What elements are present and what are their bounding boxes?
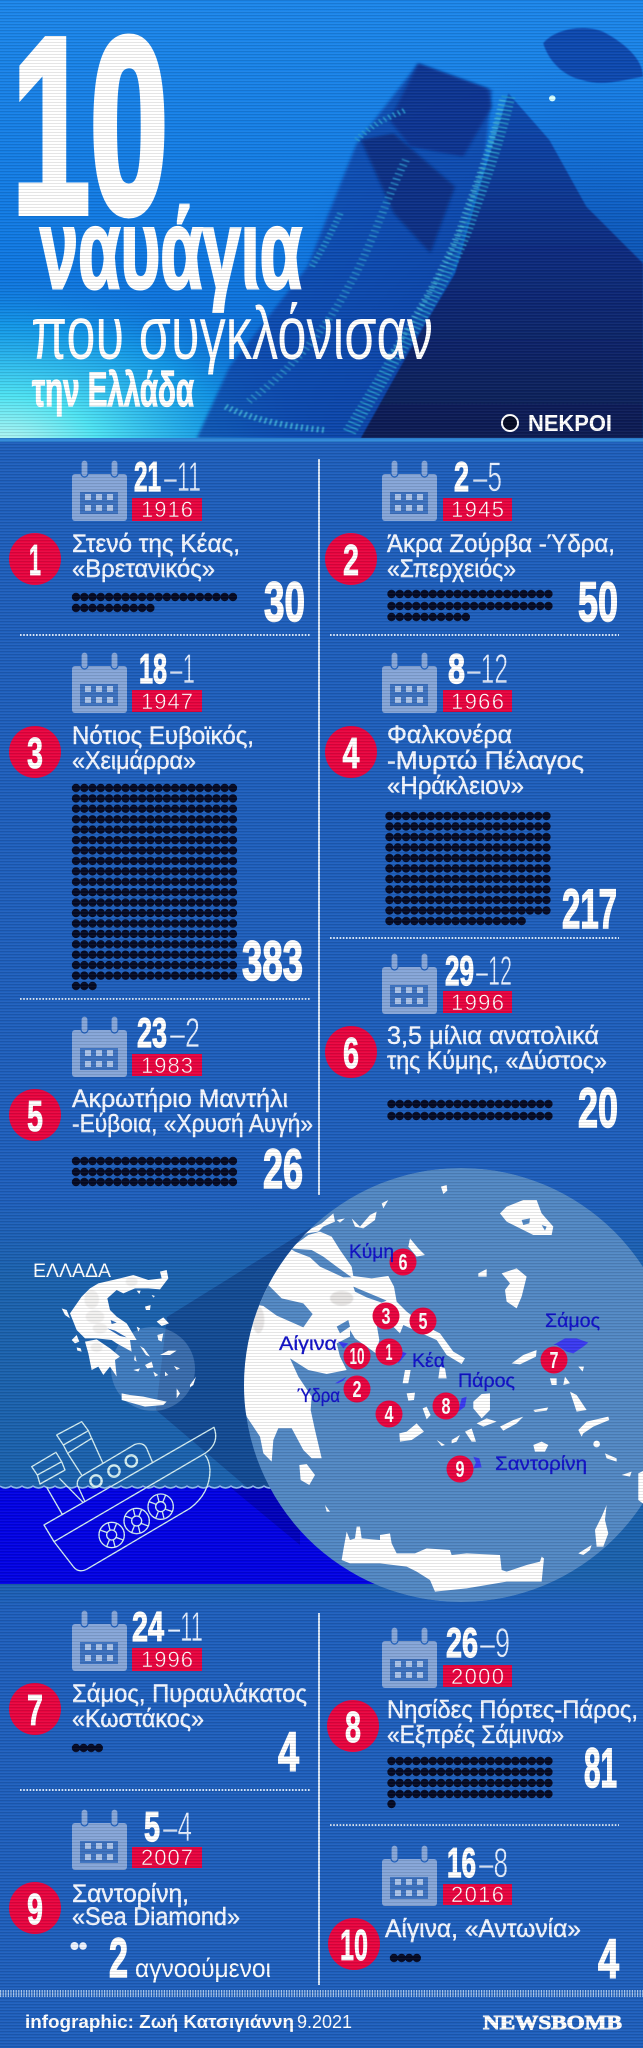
icon: calendar bbox=[382, 1627, 437, 1688]
marker 3: 3 bbox=[382, 1303, 390, 1329]
marker 2: 2 bbox=[352, 1376, 362, 1402]
victim dots bbox=[392, 1761, 549, 1804]
location: -Εύβοια, «Χρυσή Αυγή» bbox=[72, 1110, 313, 1138]
footer credit: 9.2021 bbox=[297, 2012, 352, 2032]
footer hatch band bbox=[0, 1990, 643, 1997]
date: 24 bbox=[132, 1603, 164, 1650]
victim dots bbox=[70, 1942, 87, 1950]
number badge: 3 bbox=[27, 729, 43, 778]
victim dots bbox=[392, 1104, 549, 1116]
icon: calendar bbox=[72, 460, 127, 521]
highlighted island: Aegina bbox=[338, 1342, 348, 1348]
map markers bbox=[344, 1248, 568, 1482]
accent strip under header bbox=[0, 438, 643, 442]
year badge: 2007 bbox=[141, 1845, 193, 1870]
marker 7 bbox=[540, 1346, 568, 1374]
date: –11 bbox=[168, 1603, 203, 1650]
title line: την Ελλάδα: την Ελλάδα bbox=[32, 364, 194, 417]
icon: zoomed map of Greece and Aegean bbox=[233, 1185, 588, 1462]
map place labels: Κύμη bbox=[349, 1242, 394, 1263]
sea band bbox=[0, 1487, 400, 1584]
marker 9 bbox=[446, 1456, 474, 1482]
highlighted island: Santorini bbox=[473, 1457, 482, 1468]
location: «Βρετανικός» bbox=[72, 555, 215, 583]
victim dots bbox=[394, 1954, 417, 1962]
lens shadow bbox=[156, 1228, 461, 1528]
year badge: 1983 bbox=[141, 1053, 193, 1078]
deaths count: 50 bbox=[578, 570, 618, 633]
date: 16 bbox=[447, 1839, 476, 1886]
deaths count: 4 bbox=[278, 1720, 299, 1783]
panel: wreck 7 bbox=[9, 1603, 307, 1783]
date: –1 bbox=[170, 645, 195, 692]
date bbox=[448, 645, 508, 692]
year badge: 2016 bbox=[451, 1882, 504, 1907]
deaths count: 30 bbox=[264, 570, 305, 633]
column divider bottom bbox=[318, 1613, 320, 1985]
location bbox=[72, 1880, 240, 1931]
footer credit: infographic: Ζωή Κατσιγιάννη bbox=[25, 2012, 294, 2032]
highlighted island: Samos bbox=[553, 1338, 588, 1353]
number badge: 7 bbox=[27, 1686, 43, 1735]
location bbox=[387, 1022, 607, 1075]
victim dots bbox=[76, 788, 233, 986]
year badge: 1947 bbox=[141, 689, 193, 714]
panel: wreck 2 bbox=[325, 453, 618, 633]
icon: calendar bbox=[72, 1016, 127, 1077]
date: 21 bbox=[134, 453, 161, 500]
date bbox=[144, 1803, 192, 1850]
marker 9: 9 bbox=[456, 1456, 464, 1482]
map place labels: Ύδρα bbox=[297, 1386, 340, 1407]
column divider top bbox=[318, 459, 320, 1195]
number badge: 4 bbox=[342, 729, 360, 778]
missing count bbox=[109, 1926, 271, 1989]
date: 18 bbox=[139, 645, 167, 692]
map place labels: Σαντορίνη bbox=[495, 1454, 587, 1475]
victim dots bbox=[392, 594, 549, 617]
year badge: 1996 bbox=[141, 1647, 193, 1672]
panel: wreck 5 bbox=[9, 1009, 313, 1200]
number badge: 6 bbox=[343, 1029, 359, 1078]
location bbox=[72, 1680, 307, 1733]
icon: calendar bbox=[382, 1845, 437, 1906]
marker 3 bbox=[372, 1302, 400, 1330]
location: «Σπερχειός» bbox=[387, 555, 516, 583]
wave line bbox=[0, 1486, 286, 1488]
logo: Newsbomb: NEWSBOMB bbox=[483, 2012, 622, 2034]
panel: map section bbox=[0, 1168, 643, 1602]
lens shadow over sea bbox=[230, 1487, 300, 1545]
location: Νότιος Ευβοϊκός, bbox=[72, 722, 254, 750]
year badge: 1945 bbox=[451, 497, 504, 522]
number badge bbox=[9, 726, 61, 778]
location: Νησίδες Πόρτες-Πάρος, bbox=[387, 1696, 638, 1724]
title word: ναυάγια: ναυάγια bbox=[40, 187, 302, 312]
marker 5 bbox=[410, 1308, 436, 1334]
marker 7: 7 bbox=[550, 1347, 558, 1373]
map label: Ελλάδα: ΕΛΛΑΔΑ bbox=[33, 1261, 111, 1282]
icon: southern Aegean and Crete bbox=[299, 1392, 643, 1592]
number badge bbox=[325, 726, 377, 778]
deaths count: 4 bbox=[598, 1927, 619, 1990]
title line: που συγκλόνισαν: που συγκλόνισαν bbox=[31, 291, 433, 375]
marker 4 bbox=[376, 1400, 402, 1428]
icon: sinking ship bbox=[32, 1422, 216, 1571]
date: 26 bbox=[446, 1619, 478, 1666]
icon: calendar bbox=[72, 1610, 127, 1671]
location: της Κύμης, «Δύστος» bbox=[387, 1047, 607, 1075]
map place labels: Αίγινα bbox=[279, 1334, 337, 1355]
missing count: 2 bbox=[109, 1926, 128, 1989]
location bbox=[387, 530, 615, 583]
marker 8 bbox=[432, 1392, 460, 1420]
deaths count: 383 bbox=[242, 929, 303, 992]
year badge: 1966 bbox=[451, 689, 504, 714]
panel: wreck 1 bbox=[9, 453, 305, 633]
number badge: 1 bbox=[29, 536, 41, 585]
date bbox=[454, 453, 502, 500]
location: Άκρα Ζούρβα -Ύδρα, bbox=[387, 530, 615, 558]
date: –8 bbox=[479, 1839, 508, 1886]
number badge: 9 bbox=[27, 1885, 43, 1934]
dotted separators bbox=[20, 635, 619, 1825]
date: –11 bbox=[164, 453, 201, 500]
panel: wreck 8 bbox=[327, 1619, 638, 1804]
marker 6 bbox=[390, 1248, 416, 1276]
map section backdrop bbox=[0, 1198, 643, 1608]
map sea bbox=[244, 1168, 643, 1602]
location bbox=[72, 530, 240, 583]
location: -Μυρτώ Πέλαγος bbox=[387, 747, 584, 775]
panel: wreck 4 bbox=[325, 645, 617, 940]
date bbox=[132, 1603, 203, 1650]
number badge: 2 bbox=[343, 536, 359, 585]
location bbox=[387, 721, 584, 800]
marker 6: 6 bbox=[398, 1249, 408, 1275]
number badge bbox=[328, 1918, 380, 1970]
number badge bbox=[325, 1026, 377, 1078]
marker 5: 5 bbox=[418, 1308, 428, 1334]
icon: diver bbox=[543, 28, 643, 101]
date: 23 bbox=[137, 1009, 167, 1056]
map place labels: Σάμος bbox=[545, 1311, 600, 1332]
date: –9 bbox=[480, 1619, 510, 1666]
marker 10: 10 bbox=[350, 1343, 364, 1369]
location: «Sea Diamond» bbox=[72, 1903, 240, 1931]
small lens circle bbox=[111, 1327, 195, 1411]
marker 4: 4 bbox=[384, 1401, 394, 1427]
date bbox=[134, 453, 201, 500]
panel: wreck 9 bbox=[9, 1803, 271, 1989]
number badge: 10 bbox=[340, 1921, 368, 1970]
location: «Ηράκλειον» bbox=[387, 772, 524, 800]
map place labels: Πάρος bbox=[458, 1371, 515, 1392]
icon: calendar bbox=[72, 1809, 127, 1870]
marker 1: 1 bbox=[386, 1339, 393, 1365]
date: –2 bbox=[170, 1009, 200, 1056]
victim dots bbox=[76, 597, 233, 608]
icon: calendar bbox=[72, 652, 127, 713]
date bbox=[445, 947, 512, 994]
big lens circle map bbox=[233, 1168, 643, 1602]
number badge: 5 bbox=[27, 1092, 43, 1141]
number badge bbox=[325, 533, 377, 585]
highlighted island: Hydra bbox=[335, 1377, 347, 1383]
deaths count: 20 bbox=[578, 1076, 618, 1139]
victim dots bbox=[390, 816, 547, 921]
date: –5 bbox=[473, 453, 502, 500]
number badge bbox=[9, 1882, 61, 1934]
victim dots bbox=[76, 1744, 99, 1752]
icon: small map of Greece bbox=[62, 1270, 196, 1407]
location: «Κωστάκος» bbox=[72, 1705, 204, 1733]
number badge bbox=[327, 1700, 379, 1752]
map place labels bbox=[279, 1242, 600, 1475]
location bbox=[387, 1696, 638, 1749]
icon: calendar bbox=[382, 460, 437, 521]
date: –4 bbox=[163, 1803, 192, 1850]
number badge bbox=[9, 1089, 61, 1141]
panel: wreck 6 bbox=[325, 947, 618, 1139]
number badge bbox=[9, 1683, 61, 1735]
location bbox=[72, 722, 254, 775]
location: Αίγινα, «Αντωνία» bbox=[385, 1915, 581, 1943]
location: Φαλκονέρα bbox=[387, 721, 512, 749]
panel: wreck 10 bbox=[328, 1839, 619, 1990]
marker 2 bbox=[344, 1376, 370, 1402]
panel: header photo of shipwreck bbox=[0, 0, 643, 438]
date: –12 bbox=[476, 947, 512, 994]
location bbox=[72, 1085, 313, 1138]
victim dots bbox=[76, 1161, 233, 1182]
marker 1 bbox=[376, 1338, 402, 1366]
location: Σαντορίνη, bbox=[72, 1880, 189, 1908]
date: 29 bbox=[445, 947, 474, 994]
number badge bbox=[9, 533, 61, 585]
number badge: 8 bbox=[345, 1703, 361, 1752]
missing count: αγνοούμενοι bbox=[135, 1953, 271, 1983]
location: Ακρωτήριο Μαντήλι bbox=[72, 1085, 288, 1113]
year badge: 1916 bbox=[141, 497, 193, 522]
highlighted island: Paros bbox=[458, 1397, 467, 1412]
marker 10 bbox=[344, 1342, 370, 1370]
year badge: 1996 bbox=[451, 990, 504, 1015]
title bbox=[12, 0, 433, 417]
date: 5 bbox=[144, 1803, 160, 1850]
location: «Εξπρές Σάμινα» bbox=[387, 1721, 564, 1749]
location: «Χειμάρρα» bbox=[72, 747, 196, 775]
location: 3,5 μίλια ανατολικά bbox=[387, 1022, 599, 1050]
location: Στενό της Κέας, bbox=[72, 530, 240, 558]
deaths count: 26 bbox=[263, 1137, 303, 1200]
year badge: 2000 bbox=[451, 1664, 504, 1689]
panel: wreck 3 bbox=[9, 645, 303, 992]
location: Σάμος, Πυραυλάκατος bbox=[72, 1680, 307, 1708]
highlighted island: Kea bbox=[398, 1350, 407, 1363]
map place labels: Κέα bbox=[412, 1351, 445, 1372]
date: –12 bbox=[467, 645, 508, 692]
date: 2 bbox=[454, 453, 469, 500]
icon: calendar bbox=[382, 953, 437, 1014]
icon: calendar bbox=[382, 652, 437, 713]
date: 8 bbox=[448, 645, 465, 692]
marker 8: 8 bbox=[442, 1393, 451, 1419]
legend: νεκροί: ΝΕΚΡΟΙ bbox=[528, 410, 612, 436]
